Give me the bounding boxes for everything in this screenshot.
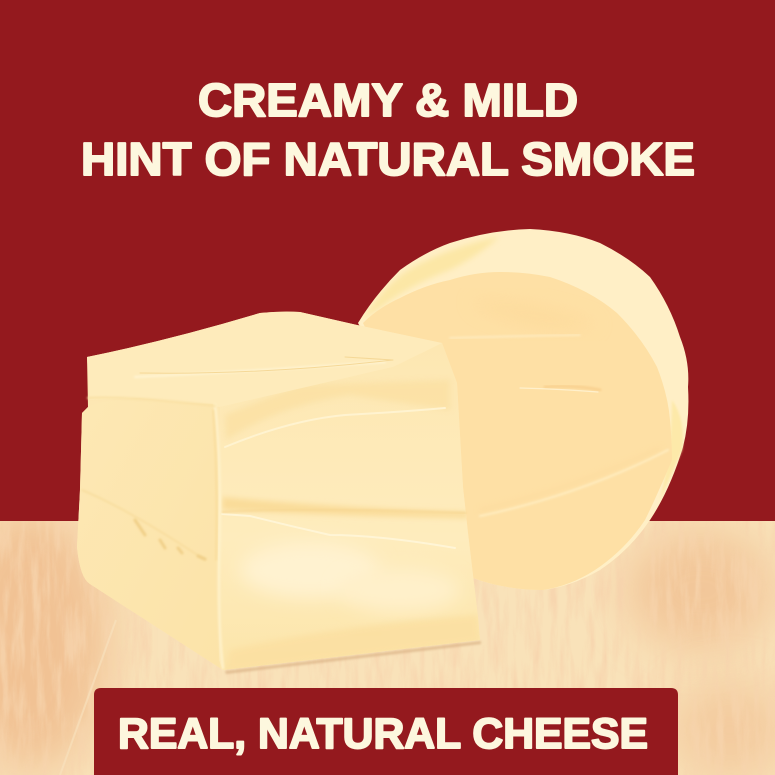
round cut face (363, 272, 672, 590)
block left face (77, 400, 223, 670)
block edges and cracks (82, 357, 466, 668)
bright centre patch (240, 542, 380, 598)
round face shadow streak (470, 300, 600, 329)
banner text: REAL, NATURAL CHEESE (118, 710, 648, 758)
middle groove shadow (222, 497, 468, 518)
wooden table surface (0, 510, 775, 775)
block top face (87, 312, 442, 407)
label banner (94, 688, 678, 775)
title (81, 74, 695, 185)
block front face (218, 343, 480, 670)
round right rim yellow (660, 400, 683, 500)
round shaded rind highlight (362, 236, 500, 320)
upper front ledge shadow (225, 380, 450, 440)
banner background (94, 688, 678, 775)
round outline and rind (358, 229, 688, 590)
cheese block (77, 312, 481, 674)
block silhouette (77, 312, 480, 670)
cheese round (358, 229, 688, 590)
title line 2: HINT OF NATURAL SMOKE (81, 133, 695, 185)
block front shading (222, 380, 480, 672)
title line 1: CREAMY & MILD (198, 74, 578, 126)
round knife marks (450, 335, 668, 516)
lower shadow (230, 616, 478, 668)
block soft shadow on the table (225, 641, 481, 674)
